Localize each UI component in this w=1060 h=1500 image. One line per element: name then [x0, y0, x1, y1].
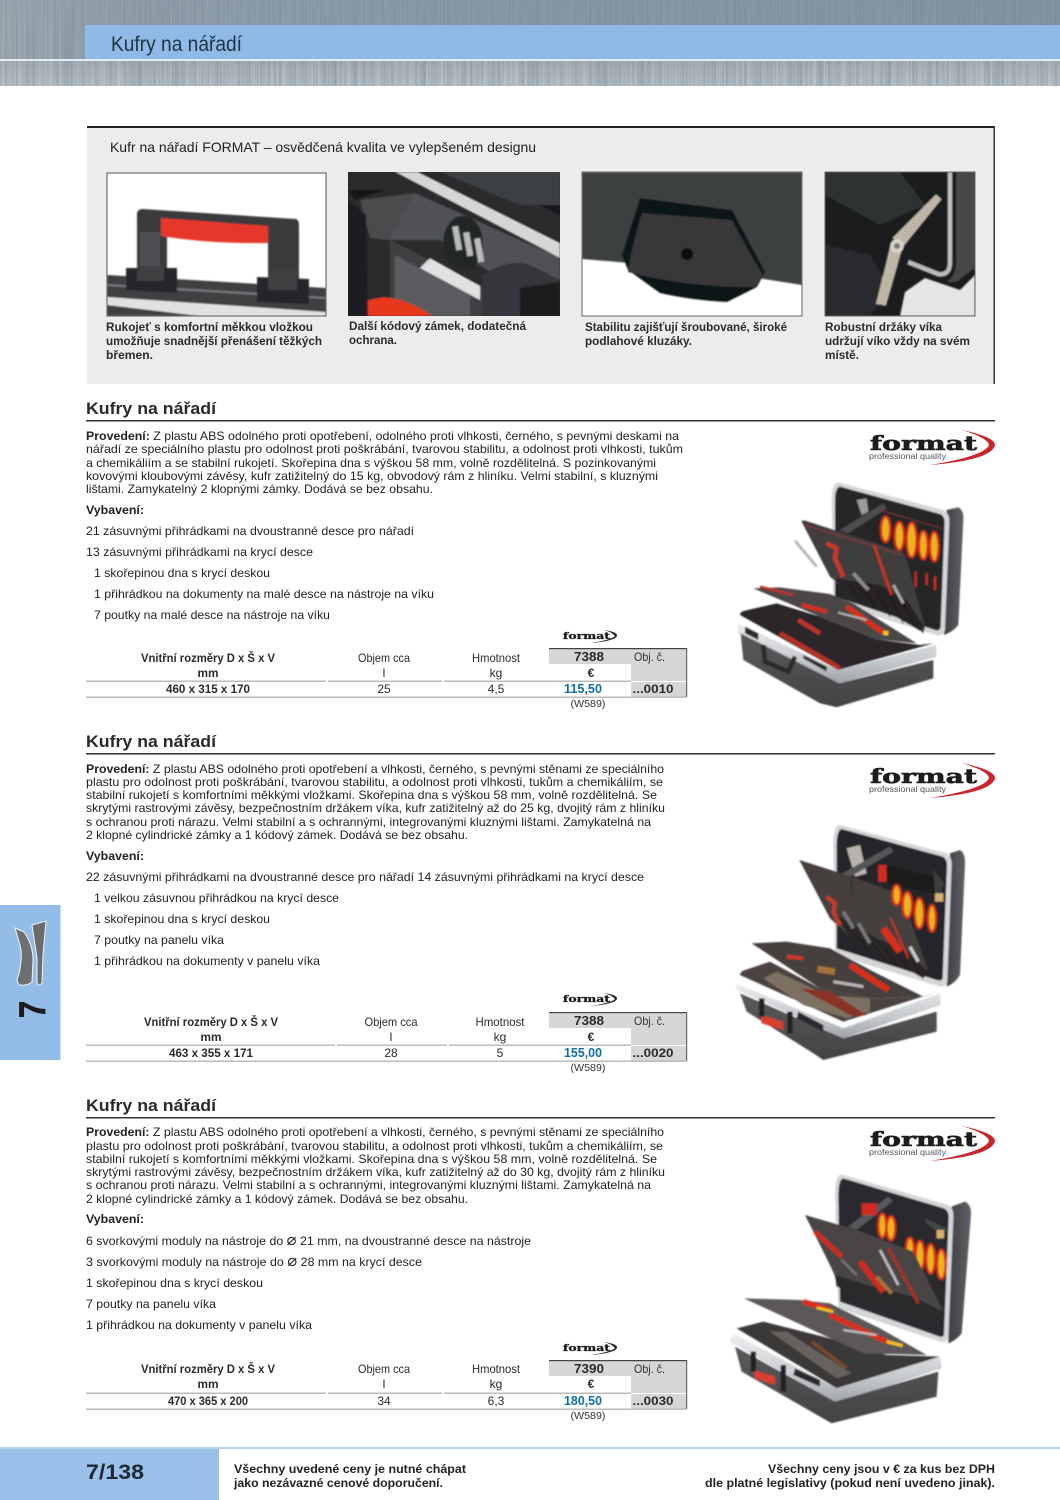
section 2 format logo: format: [870, 764, 978, 788]
caption: handle: [106, 322, 322, 362]
section 3 description: s ochranou proti nárazu. Velmi stabilní a s ochrannými, integrovanými kluznými lištami. Zamykatelná na: [86, 1178, 651, 1192]
section 2 table: mm: [200, 1030, 222, 1044]
panel: FORMAT features: [87, 126, 995, 384]
caption: handle: umožňuje snadnější přenášení těžkých: [106, 336, 322, 348]
section 3 description: plastu pro odolnost proti poškrábání, tvarovou stabilitu, a odolnost proti vlhkosti, tukům a chemikáliím, se: [86, 1139, 663, 1153]
section 1 equipment list: 7 poutky na malé desce na nástroje na víku: [94, 608, 330, 622]
section 1 equipment list: 13 zásuvnými přihrádkami na krycí desce: [86, 545, 313, 559]
section 1 table: Obj. č.: [634, 650, 665, 664]
caption: lid stay: udržují víko vždy na svém: [825, 336, 970, 348]
photo: lid stay: [825, 172, 975, 316]
section 1 table: 115,50: [564, 682, 602, 696]
section 1 format logo: professional quality: [869, 451, 947, 461]
section 1 format logo: [869, 430, 995, 465]
section 1 table: 7388: [574, 649, 604, 664]
footer note left: jako nezávazné cenové doporučení.: [233, 1476, 443, 1490]
section 1 equipment list: Vybavení:: [86, 503, 144, 517]
section 1 small logo: format: [563, 632, 611, 642]
section 1 description: Provedení: Z plastu ABS odolného proti opotřebení, odolného proti vlhkosti, černého, s pevnými deskami na: [86, 429, 679, 443]
chapter tab: [0, 905, 60, 1060]
section 2 description: [86, 762, 665, 842]
icon: knife and spatula: [15, 921, 46, 985]
section 2 case photo: [736, 825, 965, 1060]
section 3 table: 470 x 365 x 200: [168, 1394, 248, 1408]
section 3 table: (W589): [570, 1410, 606, 1422]
section 1 equipment list: 21 zásuvnými přihrádkami na dvoustranné desce pro nářadí: [86, 524, 415, 538]
section 3 table: Objem cca: [358, 1362, 410, 1376]
section 1 description: kovovými kloubovými závěsy, kufr zatižitelný do 15 kg, obvodový rám z hliníku. Velmi stabilní, s kluznými: [86, 469, 658, 483]
section 2 table: l: [390, 1030, 392, 1044]
caption: floor glide: Stabilitu zajišťují šroubované, široké: [585, 322, 787, 334]
section 2 description: Provedení: Z plastu ABS odolného proti opotřebení a vlhkosti, černého, s pevnými stěnami ze speciálního: [86, 762, 664, 776]
section 3 equipment list: 1 přihrádkou na dokumenty v panelu víka: [86, 1318, 312, 1332]
section 3 table: kg: [490, 1377, 502, 1391]
section 3 description: [86, 1125, 665, 1206]
photo: handle: [107, 173, 326, 316]
footer note right: Všechny ceny jsou v € za kus bez DPH: [768, 1462, 995, 1476]
section 2 table: 5: [497, 1046, 504, 1060]
section 2 table: 28: [384, 1046, 398, 1060]
section 3 table: [86, 1360, 687, 1422]
section 3 case photo: [729, 1174, 971, 1423]
caption: code lock: [349, 321, 527, 347]
section 1 description: lištami. Zamykatelný 2 klopnými zámky. Dodává se bez obsahu.: [86, 482, 433, 496]
section 1 format logo: format: [870, 431, 978, 455]
section 3 equipment list: 3 svorkovými moduly na nástroje do ⌀ 28 mm na krycí desce: [86, 1253, 422, 1270]
section 3 table: l: [383, 1377, 385, 1391]
caption: lid stay: Robustní držáky víka: [825, 322, 943, 334]
section 1 case photo: [737, 482, 963, 707]
section 3 equipment list: 7 poutky na panelu víka: [86, 1297, 216, 1311]
section 1 equipment list: [86, 503, 434, 622]
section 1 table: mm: [198, 666, 218, 680]
page number: 7/138: [86, 1461, 144, 1484]
photo: floor glide: [582, 172, 802, 316]
footer note left: Všechny uvedené ceny je nutné chápat: [234, 1462, 466, 1476]
caption: code lock: Další kódový zámek, dodatečná: [349, 321, 527, 333]
section 1 table: (W589): [570, 698, 606, 710]
section 3 description: Provedení: Z plastu ABS odolného proti opotřebení a vlhkosti, černého, s pevnými stěnami ze speciálního: [86, 1125, 664, 1139]
footer note left: [233, 1462, 466, 1490]
chapter number: 7: [12, 1001, 53, 1018]
section 1 description: a chemikáliím a se stabilní rukojetí. Skořepina dna s výškou 58 mm, volně rozdělitelná. S pozinkovanými: [86, 456, 656, 470]
section 2 format logo: professional quality: [869, 784, 947, 794]
page header band: [0, 0, 1060, 86]
section 2 equipment list: Vybavení:: [86, 849, 144, 863]
section 2 equipment list: [86, 849, 644, 968]
section 3 table: Hmotnost: [472, 1362, 521, 1376]
caption: handle: břemen.: [106, 350, 153, 362]
section 3 table: Vnitřní rozměry D x Š x V: [141, 1361, 275, 1376]
section 1 table: l: [383, 666, 385, 680]
section 2 equipment list: 1 skořepinou dna s krycí deskou: [94, 912, 270, 926]
section 2 table: €: [588, 1030, 595, 1044]
section 2 table: 7388: [574, 1013, 604, 1028]
section 2 description: plastu pro odolnost proti poškrábání, tvarovou stabilitu, a odolnost proti vlhkosti, tukům a chemikáliím, se: [86, 775, 663, 789]
section 3 format logo: format: [870, 1127, 978, 1151]
caption: handle: Rukojeť s komfortní měkkou vložkou: [106, 322, 313, 334]
section 3 small logo: [563, 1342, 617, 1355]
caption: lid stay: místě.: [825, 350, 859, 362]
caption: floor glide: [585, 322, 787, 348]
section 3 table: €: [588, 1377, 595, 1391]
section 3 format logo: professional quality: [869, 1147, 947, 1157]
section 3 small logo: format: [563, 1344, 611, 1354]
section 1 equipment list: 1 skořepinou dna s krycí deskou: [94, 566, 270, 580]
section 1 table: Vnitřní rozměry D x Š x V: [141, 650, 275, 665]
section 1 heading: Kufry na nářadí: [86, 399, 217, 418]
section 3 description: skrytými rastrovými závěsy, bezpečnostním držákem víka, kufr zatižitelný až do 30 kg, dvojitý rám z hliníku: [86, 1165, 665, 1179]
section 2 table: Objem cca: [364, 1015, 418, 1029]
section 2 equipment list: 1 velkou zásuvnou přihrádkou na krycí desce: [94, 891, 339, 905]
section 3 equipment list: 1 skořepinou dna s krycí deskou: [86, 1276, 263, 1290]
footer: [0, 1447, 1060, 1500]
section 2 equipment list: 7 poutky na panelu víka: [94, 933, 224, 947]
section 1 table: €: [588, 666, 595, 680]
section 1 table: Hmotnost: [472, 651, 521, 665]
caption: lid stay: [825, 322, 970, 362]
section 1 table: ...0010: [632, 682, 674, 696]
section 3 table: 34: [377, 1394, 391, 1408]
section 2 table: kg: [494, 1030, 506, 1044]
section 3 description: stabilní rukojetí s komfortními měkkými vložkami. Skořepina dna s výškou 58 mm, volně rozdělitelná. Se: [86, 1152, 657, 1166]
section 1 table: kg: [490, 666, 502, 680]
section 2 equipment list: 22 zásuvnými přihrádkami na dvoustranné desce pro nářadí 14 zásuvnými přihrádkami na krycí desce: [86, 870, 644, 884]
section 1 table: [86, 648, 687, 710]
photo: code lock: [348, 172, 560, 316]
caption: floor glide: podlahové kluzáky.: [585, 336, 692, 348]
section 2 small logo: format: [563, 995, 611, 1005]
section 2 table: Hmotnost: [476, 1015, 525, 1029]
section 3 description: 2 klopné cylindrické zámky a 1 kódový zámek. Dodává se bez obsahu.: [86, 1192, 468, 1206]
section 1 table: 4,5: [488, 682, 505, 696]
section 2 table: Vnitřní rozměry D x Š x V: [144, 1014, 278, 1029]
section 2 format logo: [869, 763, 995, 798]
section 3 equipment list: 6 svorkovými moduly na nástroje do ⌀ 21 mm, na dvoustranné desce na nástroje: [86, 1232, 531, 1249]
section 3 equipment list: Vybavení:: [86, 1212, 144, 1226]
section 3 table: 6,3: [488, 1394, 505, 1408]
panel heading: Kufr na nářadí FORMAT – osvědčená kvalita ve vylepšeném designu: [110, 139, 536, 155]
footer note right: [705, 1462, 995, 1490]
section 3 heading: Kufry na nářadí: [86, 1096, 217, 1115]
section 2 heading: Kufry na nářadí: [86, 732, 217, 751]
section 2 equipment list: 1 přihrádkou na dokumenty v panelu víka: [94, 954, 320, 968]
section 3 table: mm: [198, 1377, 218, 1391]
section 1 description: [86, 429, 683, 496]
section 2 table: [86, 1012, 687, 1074]
section 2 description: 2 klopné cylindrické zámky a 1 kódový zámek. Dodává se bez obsahu.: [86, 828, 468, 842]
section 1 table: Objem cca: [358, 651, 410, 665]
section 3 equipment list: [86, 1212, 531, 1332]
section 1 table: 25: [377, 682, 391, 696]
section 2 description: stabilní rukojetí s komfortními měkkými vložkami. Skořepina dna s výškou 58 mm, volně rozdělitelná. Se: [86, 788, 657, 802]
section 1 table: 460 x 315 x 170: [166, 682, 250, 696]
section 2 table: 155,00: [564, 1046, 602, 1060]
section 2 table: ...0020: [632, 1046, 674, 1060]
section 1 description: nářadí ze speciálního plastu pro odolnost proti poškrábání, tvarovou stabilitu, a odolnost proti vlhkosti, tukům: [86, 442, 683, 456]
section 3 table: ...0030: [632, 1394, 674, 1408]
section 1 small logo: [563, 630, 617, 643]
section 3 format logo: [869, 1126, 995, 1161]
footer note right: dle platné legislativy (pokud není uvedeno jinak).: [705, 1476, 995, 1490]
section 2 table: (W589): [570, 1062, 606, 1074]
section 2 small logo: [563, 993, 617, 1006]
section 2 description: s ochranou proti nárazu. Velmi stabilní a s ochrannými, integrovanými kluznými lištami. Zamykatelná na: [86, 815, 651, 829]
caption: code lock: ochrana.: [349, 335, 397, 347]
section 2 table: Obj. č.: [634, 1014, 665, 1028]
section 3 table: 7390: [574, 1361, 604, 1376]
section 1 equipment list: 1 přihrádkou na dokumenty na malé desce na nástroje na víku: [94, 587, 434, 601]
section 3 table: Obj. č.: [634, 1362, 665, 1376]
section 2 table: 463 x 355 x 171: [169, 1046, 253, 1060]
section 3 table: 180,50: [564, 1394, 602, 1408]
page title: Kufry na nářadí: [111, 33, 242, 56]
section 2 description: skrytými rastrovými závěsy, bezpečnostním držákem víka, kufr zatižitelný až do 25 kg, dvojitý rám z hliníku: [86, 801, 665, 815]
